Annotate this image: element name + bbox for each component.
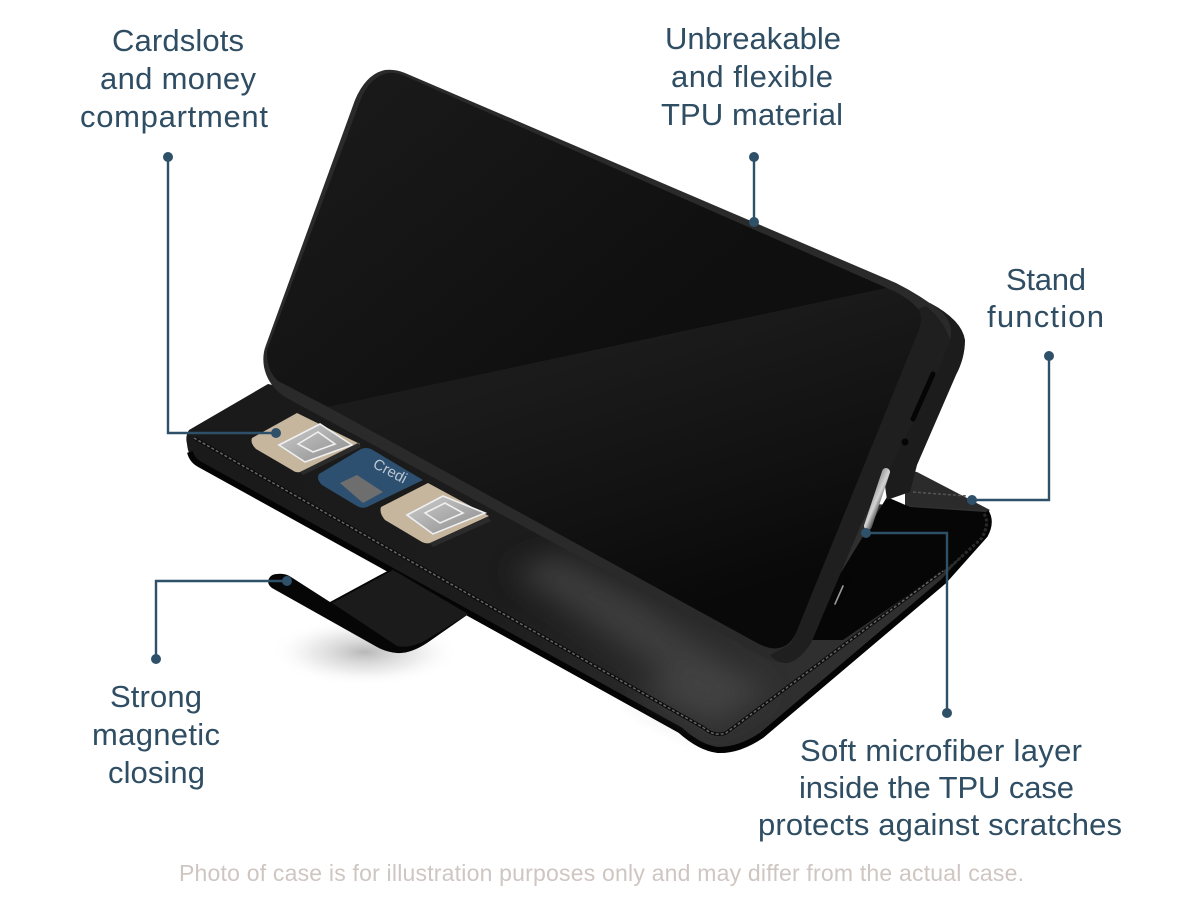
leather highlights (510, 555, 770, 725)
card slots: Credi (370, 456, 410, 487)
callout: magnetic closing (92, 576, 292, 790)
heading: TPU material: Unbreakable (665, 21, 841, 56)
heading: microfiber layer: protects against scratches (758, 807, 1122, 842)
heading: cardslots: compartment (80, 99, 268, 134)
clasp shadow (270, 618, 460, 686)
leader line: microfiber layer (866, 533, 947, 713)
phone back leather edge (880, 303, 965, 500)
wallet bottom edge (190, 452, 989, 750)
phone screen lower (328, 288, 921, 648)
phone case rim (263, 70, 951, 663)
callout: stand function (967, 262, 1104, 505)
heading: TPU material: TPU material (661, 97, 843, 132)
leader line: cardslots (168, 157, 276, 433)
heading: microfiber layer: Soft microfiber layer (800, 733, 1082, 768)
heading: microfiber layer (758, 733, 1122, 842)
heading: TPU material: and flexible (671, 59, 833, 94)
leader line: magnetic closing (156, 581, 287, 659)
sim card left (252, 413, 360, 472)
sim card right (380, 483, 489, 543)
credit card (318, 448, 423, 508)
heading: stand function (987, 262, 1104, 334)
callout: TPU material (661, 21, 843, 227)
heading: magnetic closing: magnetic (92, 717, 220, 752)
heading: stand function: function (987, 299, 1104, 334)
leader line: TPU material (753, 157, 755, 222)
callout: microfiber layer (758, 528, 1122, 842)
card slots (252, 413, 491, 547)
stitching (194, 438, 943, 734)
heading: magnetic closing: closing (108, 755, 205, 790)
heading: microfiber layer: inside the TPU case (799, 770, 1074, 805)
heading: cardslots: Cardslots (112, 23, 244, 58)
callout: cardslots (80, 23, 281, 438)
heading: magnetic closing: Strong (110, 679, 202, 714)
phone screen upper (267, 73, 887, 407)
heading: TPU material (661, 21, 843, 132)
leader line: stand function (972, 356, 1049, 500)
stand flap (905, 470, 990, 515)
heading: cardslots: and money (100, 61, 256, 96)
stand interior (800, 497, 989, 640)
product photo: phone in wallet case (186, 70, 990, 753)
stand edge (947, 514, 987, 570)
heading: magnetic closing (92, 679, 220, 790)
footnote: Photo of case is for illustration purposes only and may differ from the actual case. (179, 860, 1024, 886)
speaker slots and buttons (835, 374, 933, 604)
heading: stand function: Stand (1006, 262, 1086, 297)
case side band (770, 306, 950, 663)
heading: cardslots (80, 23, 268, 134)
wallet base (186, 384, 990, 753)
clasp strap (268, 568, 470, 653)
